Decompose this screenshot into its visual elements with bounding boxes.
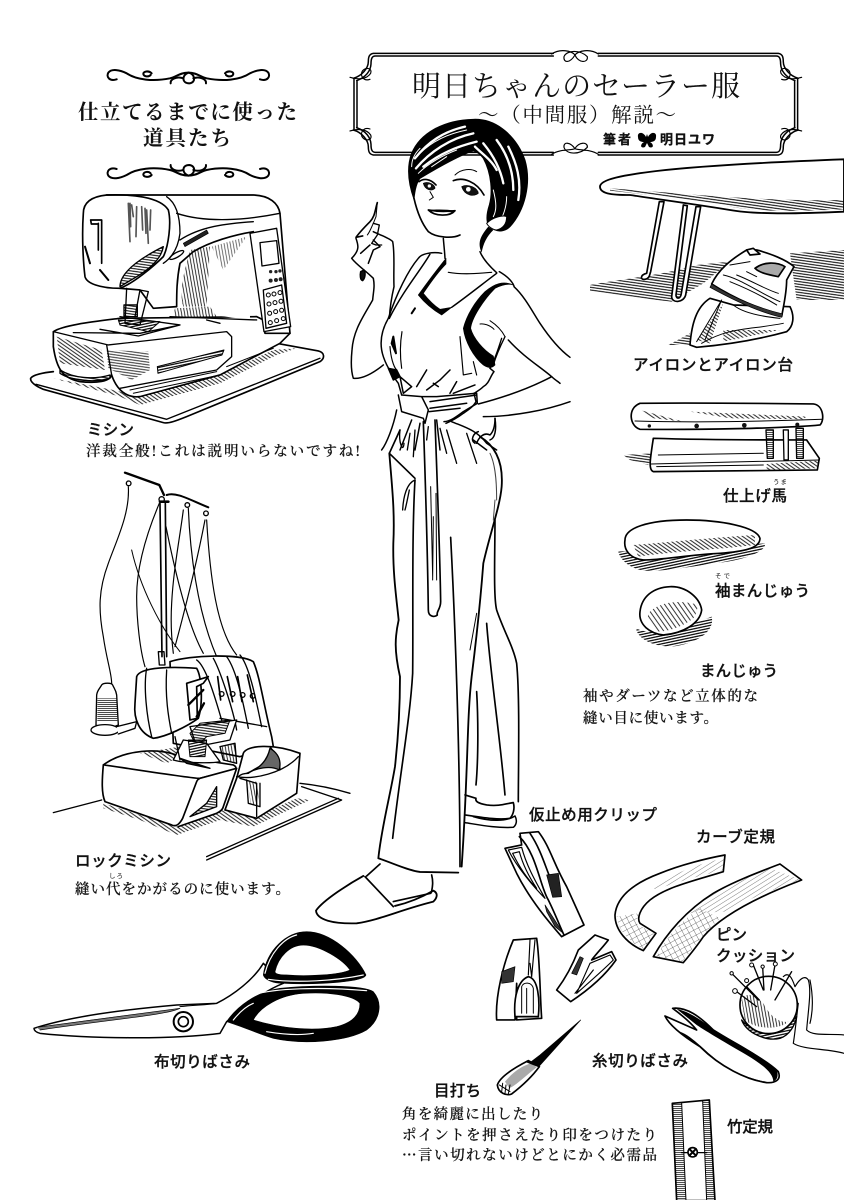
label: 仮止め用クリップ: 仮止め用クリップ (529, 806, 657, 824)
curve rulers illustration (615, 855, 802, 963)
description: ロックミシン: しろ (109, 872, 123, 880)
description: ロックミシン: 縫い代をかがるのに使います。 (75, 878, 290, 899)
pincushion illustration (730, 962, 844, 1053)
label: まんじゅう: まんじゅう (700, 663, 778, 680)
description: 目打ち: ポイントを押さえたり印をつけたり (402, 1124, 657, 1145)
label: ピンクッション: クッション (716, 947, 795, 965)
title frame (350, 51, 802, 155)
label: 袖まんじゅう (715, 572, 810, 600)
label: ロックミシン: ロックミシン (75, 852, 171, 870)
label: ピンクッション (716, 926, 795, 965)
section heading: 仕立てるまでに使った (78, 100, 297, 124)
main title: 明日ちゃんのセーラー服 (412, 64, 740, 105)
thread snips illustration (665, 1008, 779, 1083)
description: cushions (583, 685, 758, 728)
awl illustration (497, 1020, 581, 1095)
label: アイロンとアイロン台: アイロンとアイロン台 (633, 356, 793, 374)
woman: right arm on hip (446, 272, 570, 443)
label: 仕上げ馬: 仕上げ馬 (723, 487, 787, 505)
woman: head and upper body (351, 119, 528, 450)
fabric scissors illustration (34, 932, 379, 1042)
round cushion illustration (636, 587, 712, 646)
description: cushions: 袖やダーツなど立体的な (583, 685, 758, 706)
label: 仕上げ馬 (723, 478, 787, 505)
description: 目打ち (402, 1103, 657, 1165)
section heading (78, 100, 297, 150)
ornament: lower swirl (108, 165, 269, 178)
label: 糸切りばさみ: 糸切りばさみ (592, 1052, 688, 1070)
description: 目打ち: 角を綺麗に出したり (402, 1103, 543, 1124)
label: カーブ定規: カーブ定規 (696, 827, 775, 846)
face (419, 169, 484, 215)
bamboo ruler illustration (672, 1100, 715, 1200)
pressing ham board illustration (623, 403, 823, 472)
clips illustration (496, 832, 616, 1020)
author credit: 明日ユワ (660, 132, 715, 147)
label: 竹定規: 竹定規 (727, 1118, 773, 1136)
label: ミシン: ミシン (87, 422, 134, 439)
label: 袖まんじゅう: 袖まんじゅう (715, 582, 810, 600)
label: 袖まんじゅう: そで (715, 572, 730, 580)
sleeve cushion illustration (618, 520, 765, 571)
author credit: 筆者 (603, 132, 631, 147)
section heading: 道具たち (143, 127, 231, 150)
ironing board and iron illustration (590, 159, 844, 347)
ornament: upper swirl (108, 70, 269, 83)
hair (409, 119, 528, 253)
label: 布切りばさみ: 布切りばさみ (154, 1053, 250, 1071)
subtitle: 〜（中間服）解説〜 (478, 98, 676, 128)
sewing machine illustration (31, 195, 324, 423)
overlock machine illustration (53, 473, 350, 860)
woman: lower garment and slippers (316, 420, 519, 923)
description: ミシン: 洋裁全般!これは説明いらないですね! (86, 440, 360, 461)
label: 仕上げ馬: うま (773, 478, 787, 486)
hand and needle (351, 203, 394, 378)
label: ピンクッション: ピン (716, 926, 747, 944)
label: 目打ち: 目打ち (434, 1082, 481, 1100)
description: cushions: 縫い目に使います。 (583, 707, 718, 728)
description: 目打ち: …言い切れないけどとにかく必需品 (402, 1144, 657, 1165)
author credit (603, 132, 715, 147)
